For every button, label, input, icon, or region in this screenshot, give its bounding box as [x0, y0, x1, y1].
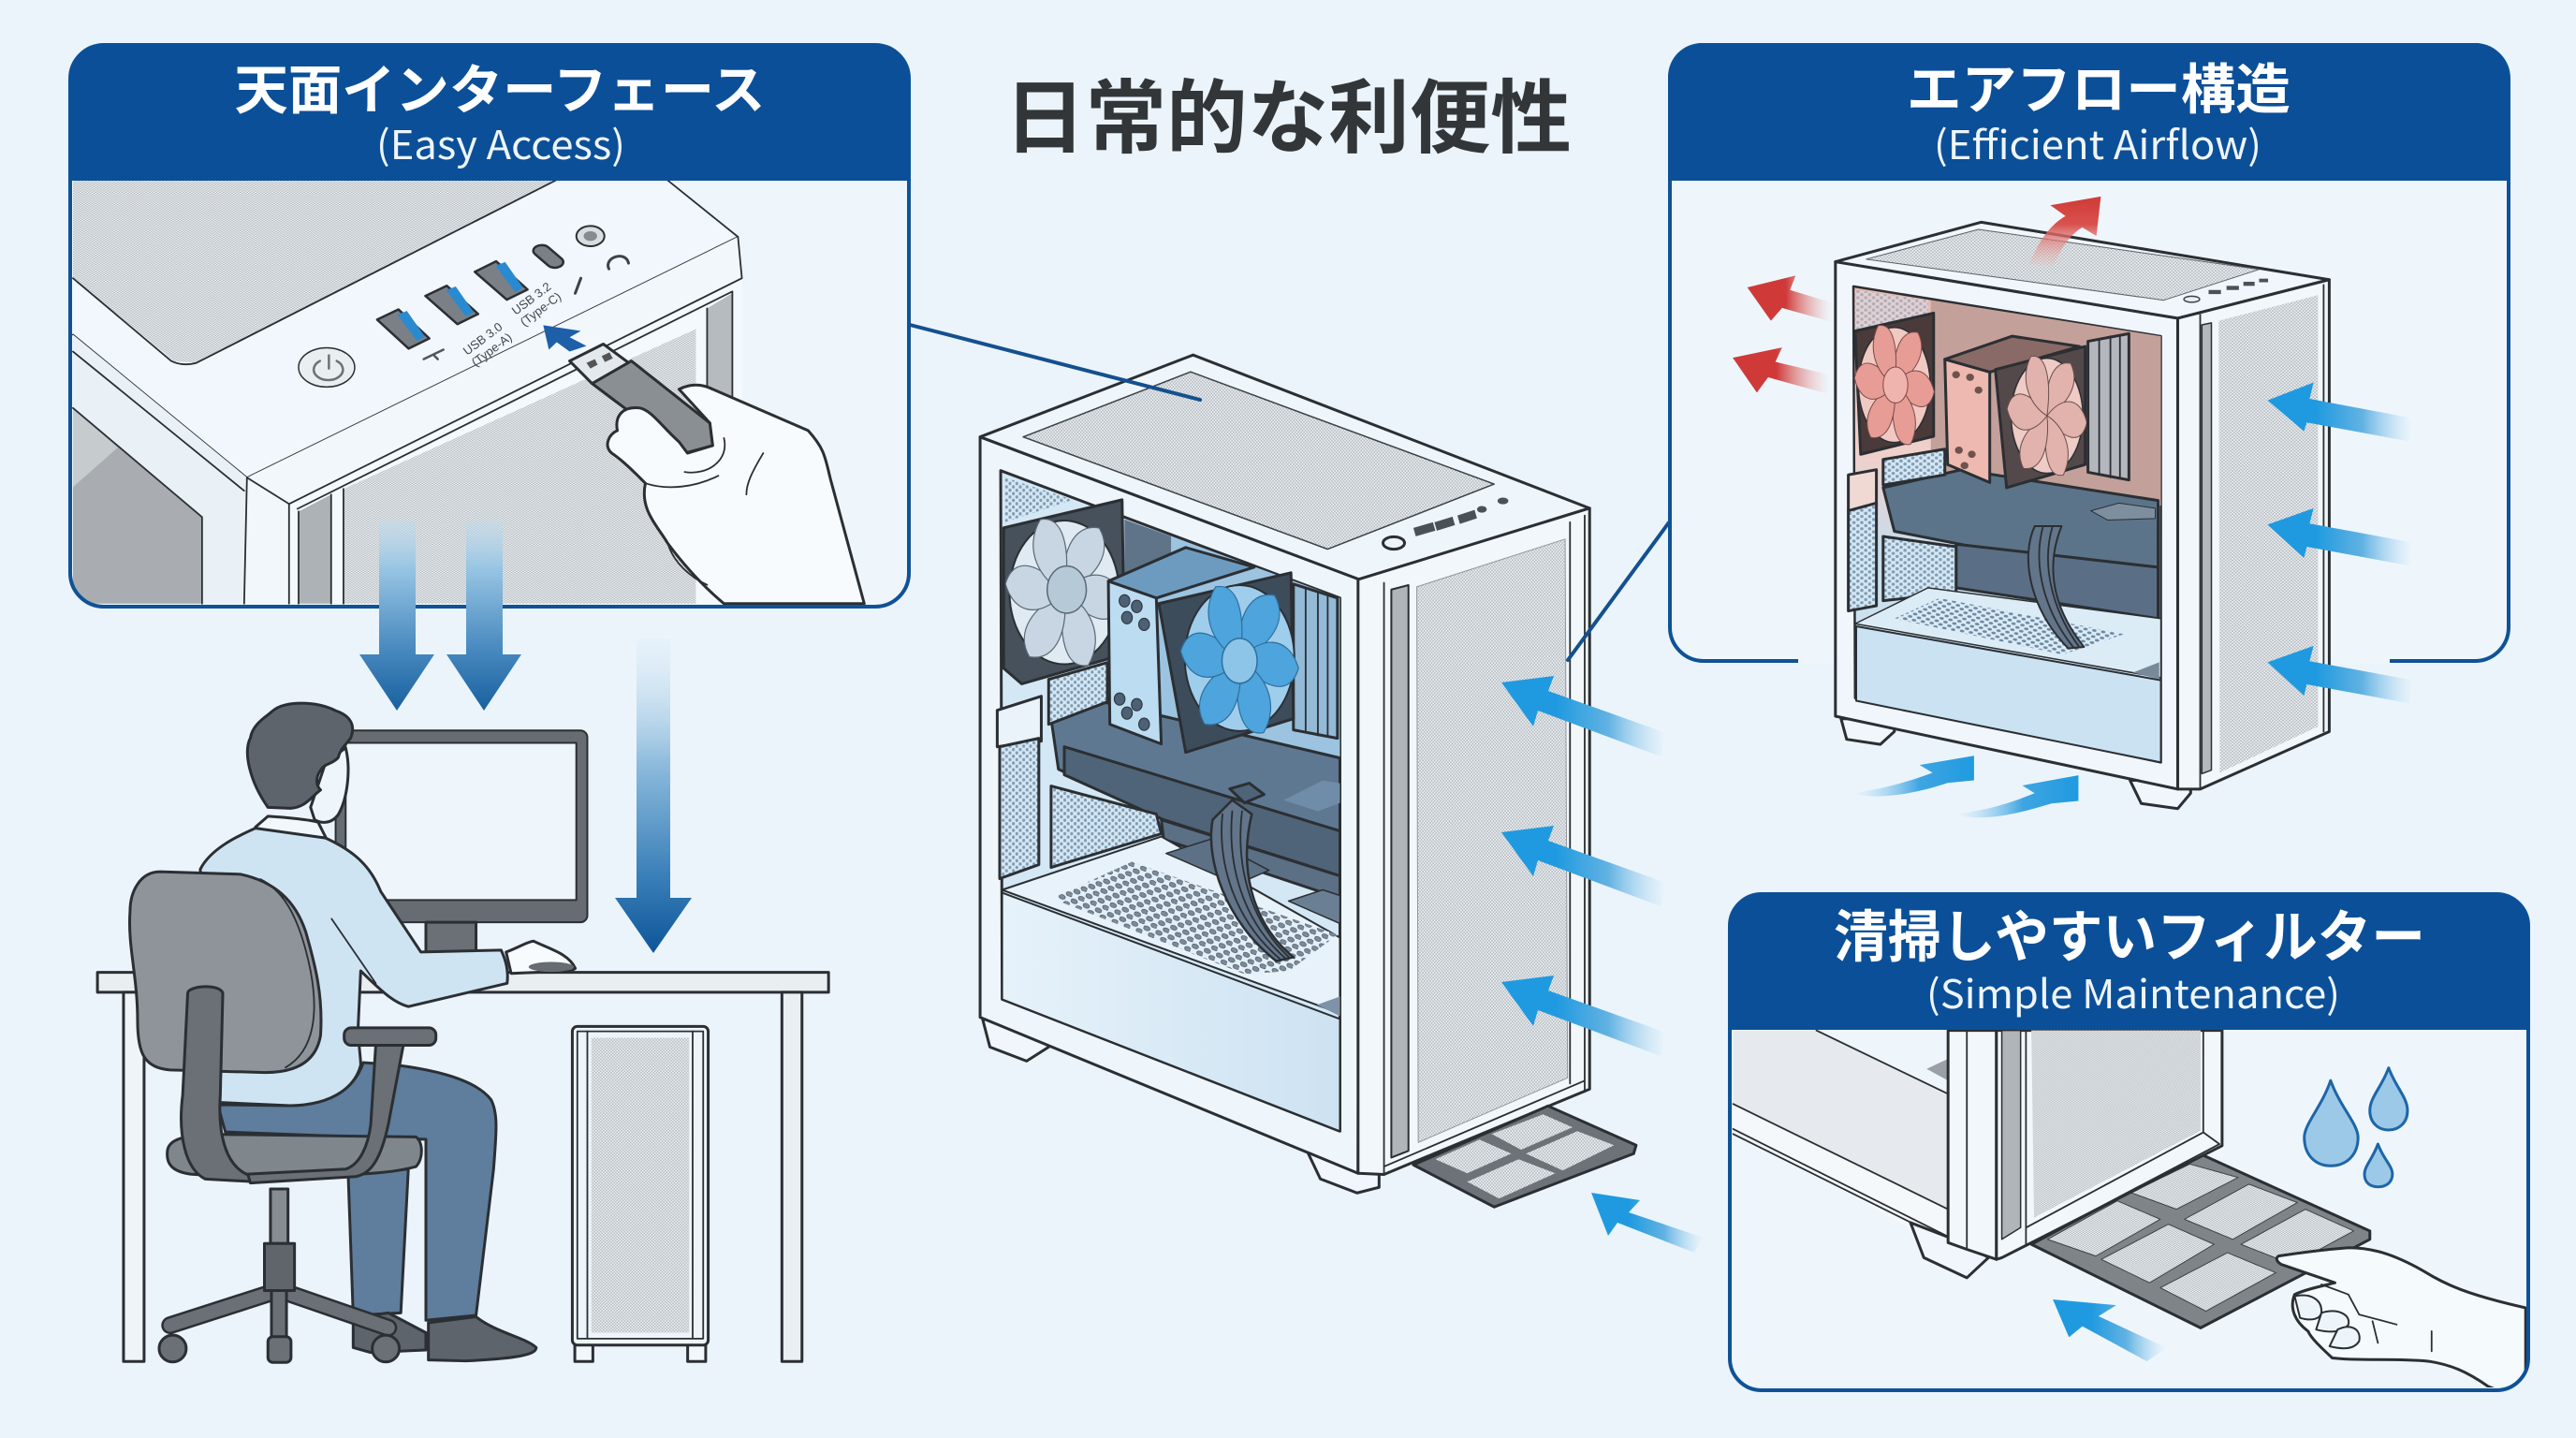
arrow: exhaust rear upper	[1748, 275, 1833, 322]
subheading: (Efficient Airflow)	[1934, 114, 2261, 171]
heading: 清掃しやすいフィルター	[1834, 906, 2425, 969]
hand	[2276, 1248, 2525, 1401]
hand	[607, 385, 864, 604]
header bar	[1729, 893, 2529, 1030]
pci slots	[1883, 449, 1945, 485]
arrow: cool air down left	[359, 521, 434, 711]
desk	[97, 973, 828, 1361]
small pc under desk	[572, 1026, 709, 1361]
header bar	[1668, 43, 2509, 181]
person	[200, 703, 576, 1361]
usb labels	[461, 278, 564, 369]
pci slots	[1048, 663, 1107, 725]
heading: エアフロー構造	[1907, 60, 2291, 121]
arrow: filter intake	[1591, 1193, 1704, 1253]
power cable	[2028, 526, 2084, 649]
front panel	[1358, 508, 1589, 1174]
arrow: filter pull	[2053, 1299, 2167, 1361]
arrow: cool air down middle	[446, 521, 521, 711]
cpu cooler	[1108, 548, 1254, 598]
icon: water drops	[2305, 1068, 2408, 1187]
arrow: intake middle	[2267, 508, 2413, 565]
filter tray	[2031, 1154, 2370, 1328]
power button	[299, 348, 355, 387]
arrow: main intake middle	[1501, 826, 1666, 906]
rear vent bracket	[997, 697, 1041, 747]
power cable	[1211, 800, 1294, 961]
feet	[983, 1019, 1379, 1193]
arrow: bottom intake left	[1852, 756, 1974, 797]
arrow: insert usb	[543, 325, 587, 352]
panel outline	[70, 45, 909, 607]
arrow: main intake bottom	[1501, 976, 1666, 1056]
warm and cool interior	[1849, 286, 2161, 762]
graphics card	[1883, 470, 2159, 570]
panel: easy access	[69, 44, 910, 607]
illustration: filter removal	[1734, 1031, 2525, 1401]
usb ports	[377, 226, 628, 360]
front io	[1383, 497, 1508, 550]
usb labels: (Type-A)	[469, 330, 515, 369]
glass side body	[980, 437, 1359, 1173]
shroud floor	[1003, 837, 1339, 1013]
usb labels: USB 3.0	[461, 319, 505, 358]
front panel	[1997, 1031, 2222, 1259]
user at desk scene	[97, 703, 828, 1362]
usb labels: USB 3.2	[509, 279, 553, 317]
header bar	[69, 44, 910, 181]
shroud	[1855, 588, 2161, 678]
exhaust fan	[1852, 313, 1937, 454]
illustration: airflow case	[1733, 197, 2413, 817]
exhaust fan	[1003, 500, 1126, 683]
removable filter	[1413, 1106, 1636, 1207]
side band and pillar	[247, 238, 738, 477]
arrow: bottom intake right	[1955, 775, 2078, 817]
subheading: (Simple Maintenance)	[1926, 963, 2340, 1020]
cpu cooler	[1945, 336, 2080, 372]
heading: 天面インターフェース	[234, 61, 766, 121]
arrow: intake upper	[2267, 382, 2413, 442]
mesh top	[73, 181, 556, 363]
panel: efficient airflow	[1668, 43, 2509, 817]
title: 日常的な利便性	[1004, 74, 1572, 164]
top mesh	[1023, 372, 1494, 550]
main pc case	[980, 355, 1636, 1207]
panel outline	[1730, 894, 2528, 1390]
panel: simple maintenance	[1729, 893, 2529, 1401]
leader line: top panel	[910, 325, 1200, 400]
arrow: exhaust rear lower	[1733, 347, 1830, 394]
usb labels: (Type-C)	[518, 289, 564, 329]
leader line: airflow panel	[1568, 522, 1669, 660]
monitor	[336, 730, 587, 952]
illustration: case top close-up	[73, 181, 864, 604]
usb stick	[570, 345, 712, 453]
subheading: (Easy Access)	[376, 114, 625, 171]
front panel	[2178, 280, 2329, 789]
interior	[997, 471, 1339, 1131]
graphics card	[1051, 702, 1339, 876]
office chair	[129, 872, 436, 1362]
top face	[980, 355, 1589, 580]
arrow: intake lower	[2267, 646, 2413, 703]
arrow: exhaust top	[2029, 197, 2100, 265]
arrow: main intake top	[1501, 676, 1666, 756]
arrow: long down	[615, 638, 692, 953]
